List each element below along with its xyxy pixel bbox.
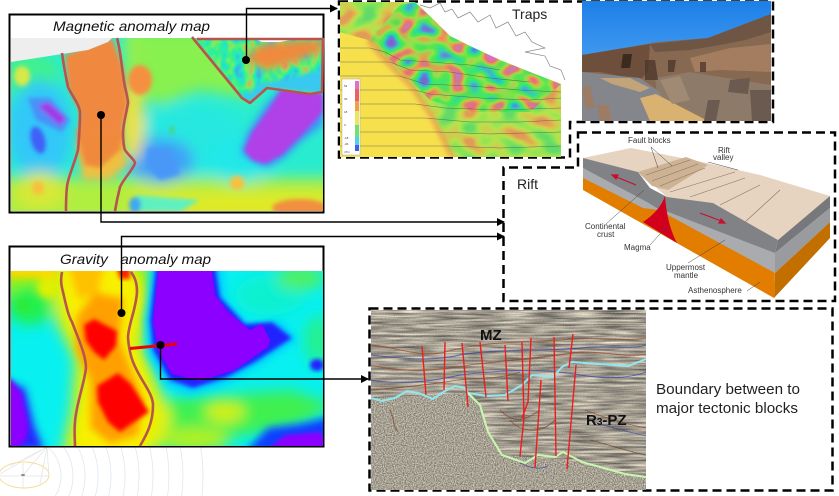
green horizon (468, 393, 646, 477)
front face: uppermost mantle (583, 168, 775, 273)
panel: rift frame (504, 132, 835, 301)
diagram labels (585, 136, 742, 295)
magnetic colour field (11, 38, 323, 211)
front face: asthenosphere (583, 172, 775, 298)
diagram labels: mantle (674, 271, 699, 280)
legend colour scale: -18 (344, 136, 349, 140)
arrow: gravity boundary to seismic panel (156, 341, 368, 379)
gravity colour field (11, 271, 323, 446)
legend colour scale (342, 79, 360, 155)
magnetic fault lines (62, 37, 323, 211)
right plate motion arrow (700, 213, 725, 223)
traps label: Traps (512, 6, 547, 22)
diagram labels: Magma (624, 243, 651, 252)
background decoration: faint compass and arcs (0, 447, 203, 496)
magma (643, 196, 677, 243)
diagram labels: Rift (718, 146, 731, 155)
arrow: gravity map to rift panel (118, 236, 504, 317)
panel: seismic frame (370, 308, 832, 490)
legend colour scale: 54 (344, 84, 348, 88)
seismic caption (656, 381, 800, 417)
legend colour scale: 0 (344, 123, 346, 127)
diagram labels: Continental (585, 222, 626, 231)
diagram labels: Asthenosphere (688, 286, 742, 295)
boundary profile red line (130, 344, 177, 348)
leader lines (606, 147, 760, 291)
seismic section (371, 310, 646, 490)
legend colour scale: nTm (344, 150, 351, 154)
rift label: Rift (517, 176, 538, 192)
MZ label: MZ (480, 327, 502, 344)
arrow: magnetic map to rift panel (97, 111, 504, 222)
seismic caption: major tectonic blocks (656, 400, 798, 417)
diagram labels: Fault blocks (628, 136, 671, 145)
panel: traps frame (339, 2, 773, 158)
gravity panel frame (10, 246, 324, 446)
magnetic panel frame (10, 14, 324, 212)
magnetic panel title: Magnetic anomaly map (53, 18, 210, 34)
top surface (583, 148, 830, 240)
right face (775, 196, 830, 253)
front face: continental crust (583, 158, 778, 253)
R3-PZ label: R3-PZ (586, 412, 627, 429)
photo: basalt columns (582, 1, 771, 121)
coloured reflectors (371, 338, 646, 468)
cyan horizon (371, 359, 646, 401)
legend colour scale: 36 (344, 97, 348, 101)
gravity fault lines (61, 272, 153, 446)
diagram labels: Uppermost (666, 263, 706, 272)
diagram: rift block (583, 136, 830, 298)
panel: magnetic anomaly map (8, 14, 324, 214)
left plate motion arrow (612, 175, 636, 185)
wiggle lines above map (420, 3, 565, 80)
gravity panel title: Gravity anomaly map (60, 251, 211, 267)
diagram labels: valley (713, 153, 733, 162)
legend colour scale: -36 (344, 142, 349, 146)
arrow: magnetic map trap area to traps panel (242, 8, 337, 64)
fault blocks (638, 157, 708, 190)
magnetic traps map (340, 2, 565, 157)
panel: gravity anomaly map (0, 246, 335, 455)
red faults (422, 334, 576, 469)
legend colour scale: 18 (344, 110, 348, 114)
diagram labels: crust (597, 230, 615, 239)
seismic caption: Boundary between to (656, 381, 800, 398)
